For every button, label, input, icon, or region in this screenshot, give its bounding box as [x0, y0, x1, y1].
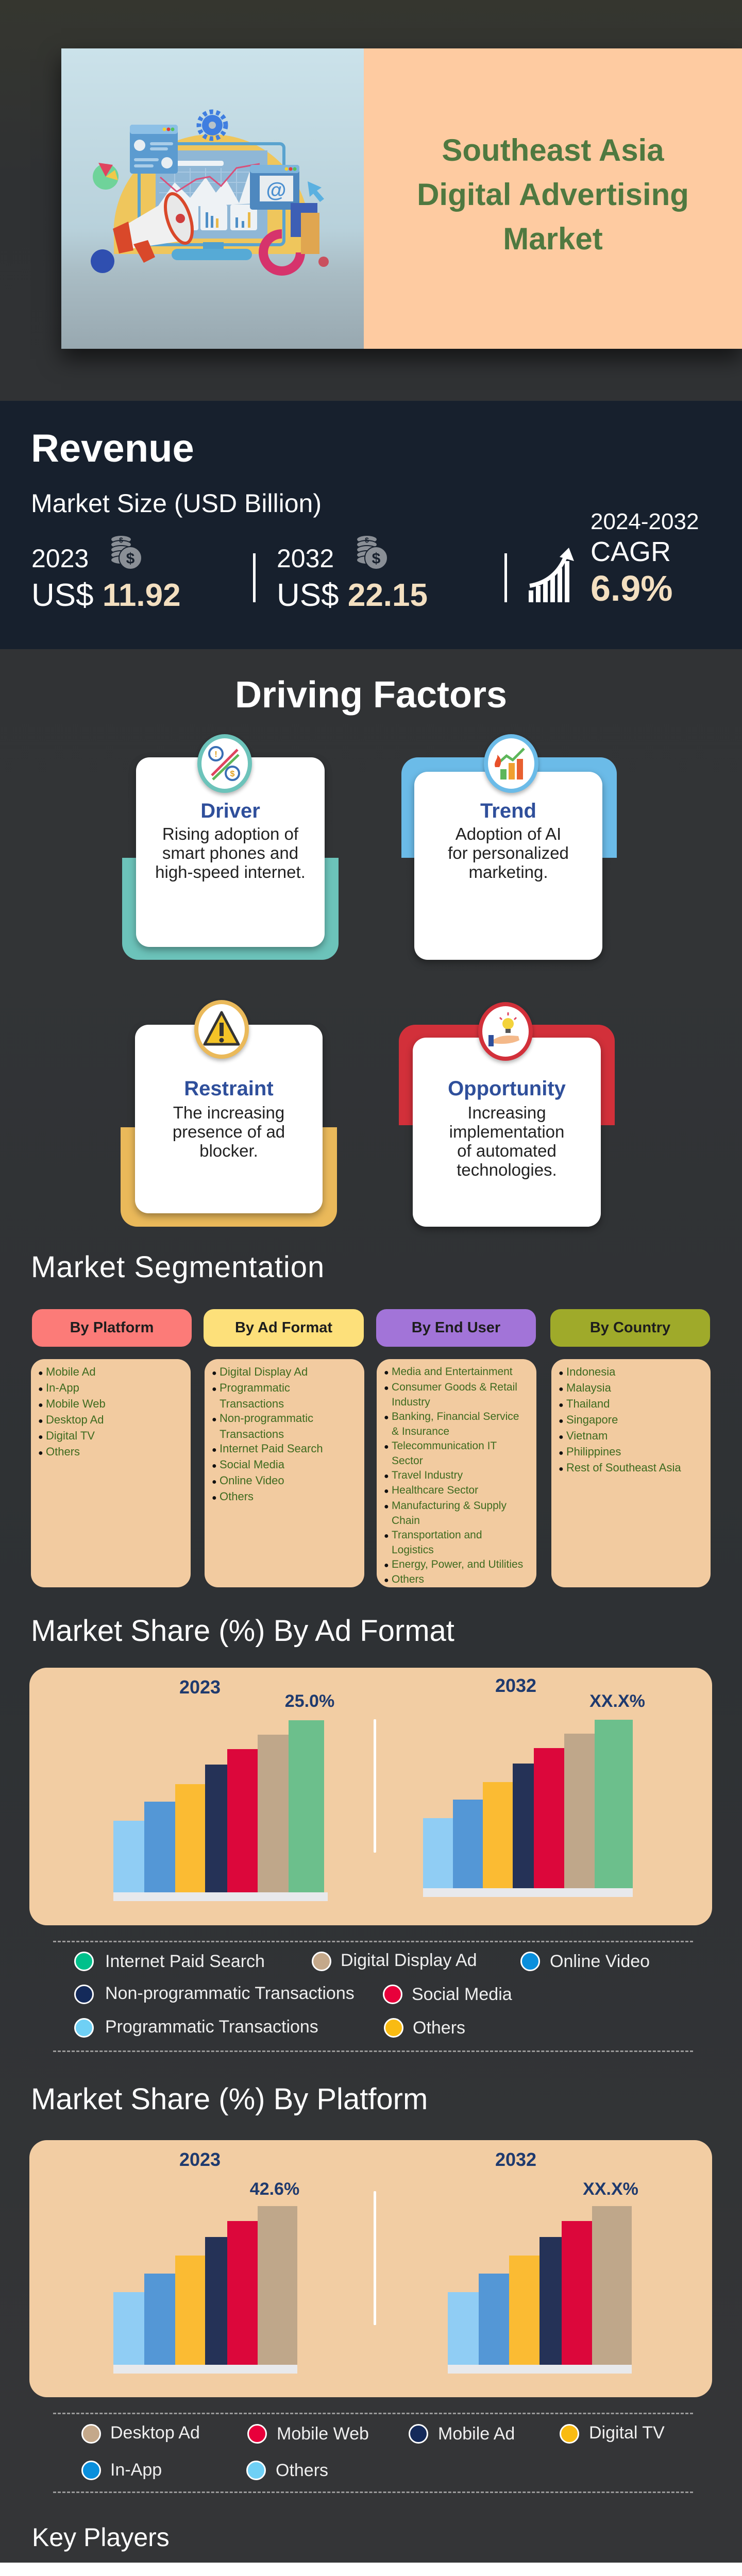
label: 42.6%: 42.6%	[250, 2179, 299, 2199]
heading: market share by platform: Market Share (%) By Platform	[31, 2082, 428, 2116]
legend: ad format: Digital Display Ad	[341, 1951, 477, 1970]
segment list: country: ●	[559, 1369, 564, 1378]
stat: CAGR: 2024-2032	[591, 509, 699, 534]
bars 2023	[113, 2206, 297, 2374]
card: trend: Trend	[480, 800, 536, 822]
card: driver: Driver	[200, 800, 260, 822]
label: XX.X%: XX.X%	[589, 1691, 645, 1711]
segment list: end user: Sector	[392, 1455, 423, 1467]
segment list: ad format: ●	[212, 1369, 217, 1378]
segment list: country: ●	[559, 1449, 564, 1458]
segment list: country: Thailand	[566, 1397, 610, 1410]
segment list: end user: Travel Industry	[392, 1469, 463, 1481]
icon: coins: $	[126, 550, 135, 567]
card: opportunity: of automated	[457, 1141, 556, 1160]
segment list: ad format: Non-programmatic	[220, 1412, 313, 1425]
heading: market share by ad format: Market Share (%) By Ad Format	[31, 1614, 454, 1648]
legend: platform: In-App	[110, 2460, 162, 2480]
segment list: country	[551, 1359, 711, 1587]
segment header: by country: By Country	[590, 1319, 670, 1336]
segment header: by end user: By End User	[412, 1319, 500, 1336]
bars 2032	[448, 2206, 632, 2374]
segment list: ad format: Internet Paid Search	[220, 1442, 323, 1455]
stat: 2032: 2032	[277, 544, 334, 573]
stat: 2023: US$ 11.92	[31, 578, 181, 613]
segment list: end user: Industry	[392, 1396, 430, 1408]
icon: growth chart	[529, 548, 574, 602]
label: 2032: 2032	[495, 1675, 536, 1696]
icon: driver: !	[214, 750, 217, 759]
segment list: end user: Energy, Power, and Utilities	[392, 1558, 523, 1570]
segment list: end user: & Insurance	[392, 1426, 449, 1437]
segment list: platform: Mobile Ad	[46, 1365, 96, 1378]
segment list: end user: Consumer Goods & Retail	[392, 1381, 517, 1393]
stat: 2032: US$ 22.15	[277, 578, 428, 613]
segment list: country: Indonesia	[566, 1365, 615, 1378]
icon: driver	[197, 734, 252, 793]
segment list: country: ●	[559, 1433, 564, 1442]
legend: platform: Others	[276, 2461, 328, 2480]
segment list: platform	[31, 1359, 191, 1587]
title: Market	[503, 222, 603, 256]
bar chart: platform	[113, 2149, 638, 2374]
title	[417, 133, 689, 256]
icon: coins	[357, 536, 387, 569]
segment list: ad format: Others	[220, 1490, 254, 1503]
heading: driving factors: Driving Factors	[235, 674, 507, 716]
legend: ad format	[74, 1951, 650, 2038]
segment list: country: Malaysia	[566, 1381, 611, 1394]
segment header: by platform	[32, 1309, 192, 1347]
bars 2023	[113, 1720, 328, 1901]
segment list: ad format: ●	[212, 1494, 217, 1502]
segment list: country: Rest of Southeast Asia	[566, 1461, 681, 1474]
icon: coins: $	[119, 536, 123, 544]
segment list: end user: Telecommunication IT	[392, 1439, 497, 1452]
segment list: end user: Others	[392, 1573, 424, 1585]
segment list: platform: Mobile Web	[46, 1397, 106, 1410]
segment list: platform: ●	[38, 1401, 43, 1410]
legend: ad format: Internet Paid Search	[105, 1952, 265, 1971]
panel: platform chart	[29, 2140, 712, 2397]
stat: 2032	[253, 536, 428, 613]
segment list: end user	[377, 1359, 536, 1587]
hero banner	[61, 48, 742, 349]
title: Digital Advertising	[417, 177, 689, 212]
segment list: platform: ●	[38, 1385, 43, 1394]
card: trend	[401, 734, 617, 963]
icon: coins: $	[372, 550, 381, 567]
icon: driver: $	[230, 770, 235, 778]
icon: coins: $	[365, 536, 369, 544]
label: 2023: 2023	[179, 2149, 221, 2170]
icon: coins	[111, 536, 141, 569]
stat: CAGR: 6.9%	[591, 568, 673, 608]
legend: ad format: Social Media	[412, 1985, 512, 2004]
legend: platform: Desktop Ad	[110, 2423, 200, 2443]
segment list: end user: ●	[384, 1487, 389, 1496]
segment list: ad format: Digital Display Ad	[220, 1365, 308, 1378]
label: XX.X%: XX.X%	[583, 2179, 638, 2199]
segment list: ad format: ●	[212, 1478, 217, 1486]
title: Southeast Asia	[442, 133, 664, 167]
legend: platform: Mobile Web	[277, 2424, 369, 2444]
heading: market segmentation: Market Segmentation	[31, 1250, 325, 1284]
segment list: end user: Banking, Financial Service	[392, 1411, 519, 1422]
segment list: end user: ●	[384, 1561, 389, 1569]
segment list: end user: ●	[384, 1413, 389, 1422]
label: 25.0%: 25.0%	[285, 1691, 334, 1711]
segment list: end user: ●	[384, 1368, 389, 1377]
panel: ad format chart	[29, 1668, 712, 1925]
card: trend: Adoption of AI	[456, 824, 561, 843]
segment list: platform: ●	[38, 1449, 43, 1458]
legend: ad format: Programmatic Transactions	[105, 2017, 318, 2037]
segment list: ad format: ●	[212, 1446, 217, 1454]
hero title panel	[364, 48, 742, 349]
segment list: country: ●	[559, 1417, 564, 1426]
icon: opportunity	[478, 1002, 533, 1061]
legend: ad format: Online Video	[550, 1952, 650, 1971]
card: restraint: blocker.	[199, 1141, 258, 1160]
card: restraint: Restraint	[184, 1077, 274, 1100]
segment header: by country	[550, 1309, 710, 1347]
bar chart: ad format	[113, 1675, 645, 1901]
segment header: by platform: By Platform	[70, 1319, 154, 1336]
segment list: country: Singapore	[566, 1413, 618, 1426]
segment list: ad format: Programmatic	[220, 1381, 290, 1394]
stat: 2023: 2023	[31, 544, 89, 573]
legend: platform: Digital TV	[589, 2423, 665, 2443]
segment header: by ad format	[204, 1309, 364, 1347]
segment list: end user: Chain	[392, 1515, 420, 1527]
segment list: ad format: ●	[212, 1462, 217, 1470]
icon: trend	[484, 734, 538, 793]
segment list: ad format: Online Video	[220, 1474, 284, 1487]
card: trend: marketing.	[468, 862, 548, 882]
segment list: country: Vietnam	[566, 1429, 608, 1442]
card: opportunity: implementation	[449, 1122, 564, 1141]
bars 2032	[423, 1720, 633, 1897]
segment header: by end user	[376, 1309, 536, 1347]
segment list: end user: ●	[384, 1384, 389, 1392]
segment list: platform: Desktop Ad	[46, 1413, 104, 1426]
segment list: platform: In-App	[46, 1381, 79, 1394]
panel: key players logos	[0, 2563, 742, 2576]
card: restraint	[121, 1000, 337, 1227]
segment list: ad format: ●	[212, 1415, 217, 1424]
card: restraint: The increasing	[173, 1103, 284, 1122]
legend: platform	[81, 2423, 665, 2480]
label: 2032: 2032	[495, 2149, 536, 2170]
subheading: market size: Market Size (USD Billion)	[31, 489, 322, 518]
segment list: end user: Manufacturing & Supply	[392, 1499, 507, 1512]
segment header: by ad format: By Ad Format	[235, 1319, 332, 1336]
segment list: end user: Media and Entertainment	[392, 1366, 513, 1378]
icon: warning	[194, 1000, 249, 1059]
revenue band	[0, 401, 742, 649]
card: trend: for personalized	[448, 843, 569, 862]
segment list: platform: ●	[38, 1433, 43, 1442]
card: driver: high-speed internet.	[155, 862, 306, 882]
segment list: ad format: Transactions	[220, 1428, 284, 1440]
segment list: country: ●	[559, 1401, 564, 1410]
segment list: end user: ●	[384, 1576, 389, 1585]
segment list: country: ●	[559, 1465, 564, 1473]
segment list: country: Philippines	[566, 1445, 621, 1458]
segment list: ad format: ●	[212, 1385, 217, 1394]
segment list: ad format: Social Media	[220, 1458, 284, 1471]
segment list: end user: ●	[384, 1502, 389, 1511]
segment list: platform: Others	[46, 1445, 80, 1458]
stat: CAGR: CAGR	[591, 536, 671, 567]
segment list: platform: ●	[38, 1369, 43, 1378]
segment list: platform: Digital TV	[46, 1429, 95, 1442]
segment list: ad format: Transactions	[220, 1397, 284, 1410]
card: opportunity	[399, 1002, 615, 1230]
segment list: end user: ●	[384, 1443, 389, 1451]
legend: ad format: Others	[413, 2018, 465, 2038]
label: 2023: 2023	[179, 1676, 221, 1698]
segment list: country: ●	[559, 1385, 564, 1394]
card: opportunity: technologies.	[457, 1160, 557, 1179]
heading: revenue: Revenue	[31, 427, 194, 470]
segment list: end user: Transportation and	[392, 1529, 482, 1540]
segment list: end user: Logistics	[392, 1544, 434, 1556]
stat: 2023	[31, 536, 181, 613]
segment list: end user: ●	[384, 1471, 389, 1481]
card: driver	[122, 734, 339, 960]
segment list: ad format	[205, 1359, 364, 1587]
legend: platform: Mobile Ad	[438, 2424, 515, 2444]
hero illustration	[61, 48, 364, 349]
heading: key players: Key Players	[32, 2523, 170, 2552]
card: opportunity: Increasing	[467, 1103, 546, 1122]
card: restraint: presence of ad	[173, 1122, 285, 1141]
segment list: platform: ●	[38, 1417, 43, 1426]
legend: ad format: Non-programmatic Transactions	[105, 1984, 355, 2003]
stat: CAGR	[504, 509, 699, 608]
card: driver: smart phones and	[162, 843, 298, 862]
hero illustration: @	[266, 179, 286, 201]
card: driver: Rising adoption of	[162, 824, 298, 843]
segment list: end user: Healthcare Sector	[392, 1484, 478, 1496]
segment list: end user: ●	[384, 1531, 389, 1540]
card: opportunity: Opportunity	[448, 1077, 566, 1100]
